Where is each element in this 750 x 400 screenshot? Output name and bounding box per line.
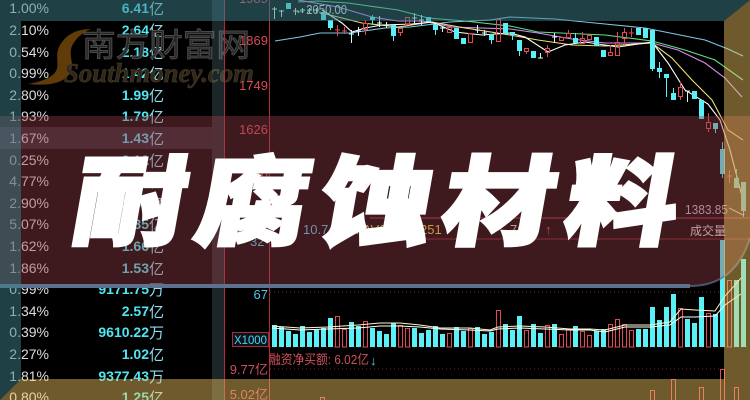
stock table: amount units: 亿 [149,304,164,321]
stock table: turnover amount column: 2.64 [122,22,149,38]
margin axis labels: 9.77亿 [230,362,268,377]
candlesticks: doji crosses [272,7,690,102]
stock table: turnover percentage column: 1.00% [9,0,49,16]
stock table: turnover amount column: 1.85 [122,216,149,232]
stock table: amount units: 万 [149,369,164,386]
highlighted table row [0,127,212,149]
stock table: turnover percentage column: 5.07% [9,216,49,232]
stock table: turnover percentage column: 2.80% [9,87,49,103]
stock table: amount units: 亿 [149,239,164,256]
title: 耐 [65,150,196,258]
stock table: turnover percentage column: 1.86% [9,260,49,276]
margin financing bars [320,370,738,400]
indicator line legend: 251 [420,222,442,237]
stock table: turnover amount column: 1.79 [122,108,149,124]
indicator line legend [250,222,552,249]
stock table: turnover percentage column: 0.25% [9,152,49,168]
title: 腐 [188,150,319,258]
stock table: amount units: 亿 [149,217,164,234]
stock table: turnover percentage column: 2.10% [9,22,49,38]
moving average lines on price chart [275,0,743,200]
volume unit box X1000: X1000 [234,333,267,347]
stock table: amount units: 亿 [149,261,164,278]
stock table: amount units: 亿 [149,347,164,364]
stock table: amount units: 亿 [149,131,164,148]
volume axis label 67: 67 [254,287,268,302]
stock table: turnover amount column: 2.57 [122,303,149,319]
indicator line legend: ↑ [545,222,552,237]
stock table: turnover percentage column: 1.93% [9,108,49,124]
stock table: turnover percentage column: 4.77% [9,173,49,189]
indicator line legend: 765 [510,222,532,237]
stock table: turnover percentage column [9,0,49,400]
indicator line legend: 32 [250,234,264,249]
price axis labels [239,0,268,181]
price axis labels: 1506 [239,166,268,181]
vertical translucent stripe [212,0,224,400]
candlesticks: falling cyan [286,3,746,217]
title [65,150,688,258]
watermark: southmoney logo: 南方财富网 [82,27,250,63]
stock table: turnover amount column: 9171.75 [98,281,149,297]
stock table: turnover percentage column: 1.67% [9,130,49,146]
stock table: turnover amount column: 6.41 [122,0,149,16]
stock table: amount units: 亿 [149,45,164,62]
margin net purchase label: ↓ [370,353,376,368]
volume caption: 成交量 [690,223,726,238]
indicator line legend: MAV0 [352,222,386,237]
stock table: turnover percentage column: 0.39% [9,324,49,340]
margin axis labels [230,362,268,400]
stock table: amount units: 亿 [149,174,164,191]
stock table: turnover percentage column: 2.27% [9,346,49,362]
panel: dark red title banner [0,116,750,286]
stock table: turnover percentage column: 1.81% [9,368,49,384]
stock table: amount units: 亿 [149,153,164,170]
stock table: turnover percentage column: 1.34% [9,303,49,319]
volume bars: falling cyan [272,240,746,347]
high price marker: ←2050.00 [295,2,347,17]
stock table: turnover percentage column: 0.99% [9,65,49,81]
price axis labels: 1869 [239,33,268,48]
stock table: amount units: 亿 [149,196,164,213]
stock table: amount units: 亿 [149,66,164,83]
stock table: turnover percentage column: 1.62% [9,238,49,254]
stock table: turnover amount column: 9610.22 [98,324,149,340]
banner lower edge highlight [0,238,750,286]
chart axis lines [224,0,750,400]
volume bars: rising red [336,280,732,347]
stock table: amount units: 亿 [149,23,164,40]
margin net purchase label: 融资净买额: 6.02亿 [269,352,369,367]
watermark: southmoney logo [28,27,254,88]
stock table: amount units: 万 [149,282,164,299]
stock table: turnover amount column: 1.66 [122,238,149,254]
watermark: southmoney logo: Southmoney.com [64,58,254,88]
stock table: turnover amount column: 2.18 [122,44,149,60]
volume moving average lines [272,278,741,332]
stock table: turnover amount column: 1.43 [122,130,149,146]
price axis labels: 1749 [239,78,268,93]
price label 1383.85: 1383.85 [685,202,728,217]
stock table: turnover amount column: 9377.43 [98,368,149,384]
stock table: amount units: 万 [149,325,164,342]
stock table: turnover amount column: 2.59 [122,195,149,211]
stock table: amount units: 亿 [149,88,164,105]
stock table: turnover amount column: 1.02 [122,346,149,362]
stock table: amount units: 亿 [149,109,164,126]
title: 材 [434,150,565,258]
title: 料 [557,150,688,258]
stock table: turnover percentage column: 2.90% [9,195,49,211]
stock table: amount units [149,1,164,400]
stock table: turnover percentage column: 0.99% [9,281,49,297]
stock table: turnover amount column [98,0,149,400]
stock table: turnover percentage column: 0.54% [9,44,49,60]
candlesticks: rising red [335,18,732,183]
stock table: amount units: 亿 [149,1,164,18]
stock table: turnover amount column: 1.97 [122,173,149,189]
indicator line legend: 10.7 [303,222,328,237]
stock table: turnover amount column: 1.42 [122,65,149,81]
stock table: turnover amount column: 1.99 [122,87,149,103]
stock table: turnover amount column: 1.53 [122,260,149,276]
price axis labels: 1626 [239,122,268,137]
title: 蚀 [311,150,442,258]
stock table: turnover amount column: 2.12 [122,152,149,168]
